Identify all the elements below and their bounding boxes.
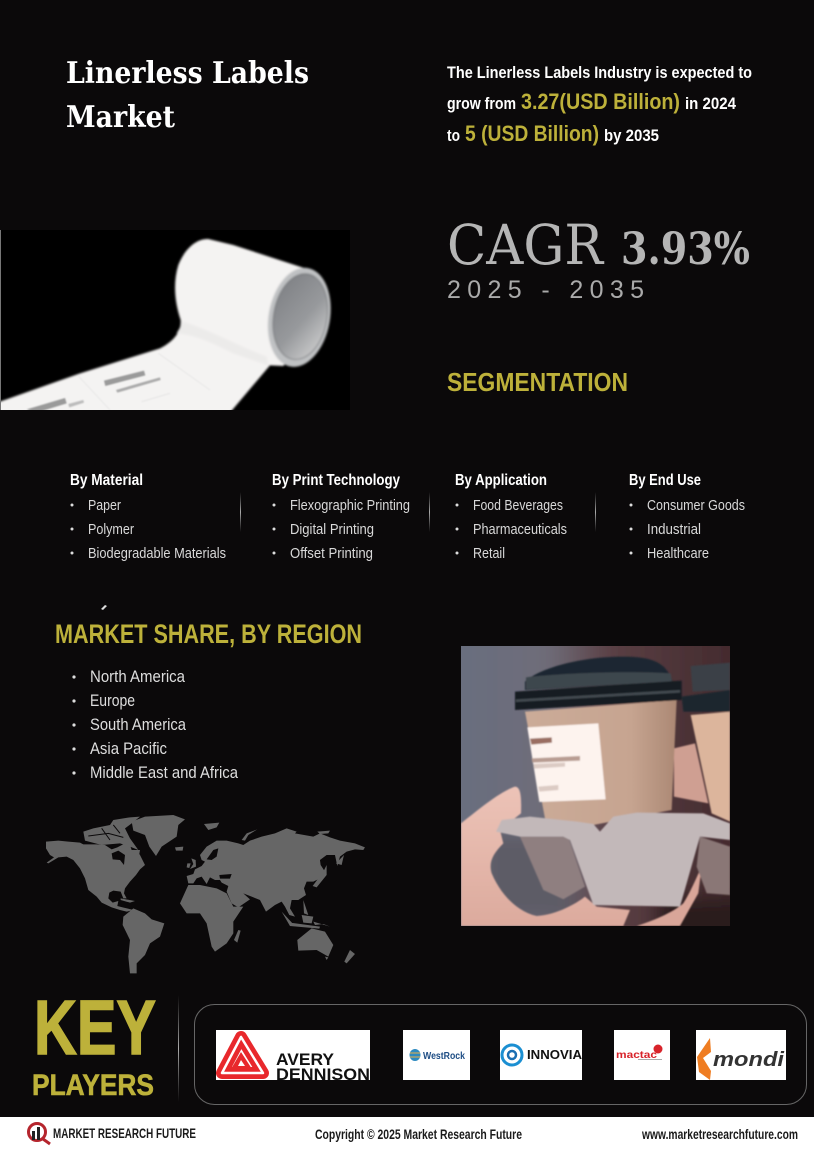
world map — [46, 815, 365, 973]
logo: westrock: WestRock — [423, 1050, 465, 1062]
column: by print technology: Flexographic Printing — [290, 497, 410, 514]
column: by end use: Healthcare — [647, 545, 709, 562]
tray pockets — [520, 837, 585, 899]
greenland — [132, 815, 185, 856]
image: linerless label roll — [0, 230, 350, 417]
iceland and arctic isles — [175, 823, 330, 851]
logo: avery dennison — [216, 1030, 370, 1084]
column: by material: Biodegradable Materials — [88, 545, 226, 562]
logo: innovia — [500, 1030, 583, 1080]
column: by print technology — [272, 472, 410, 562]
market growth summary text — [447, 64, 752, 146]
column: by print technology: By Print Technology — [272, 472, 400, 489]
cup lid — [525, 657, 673, 690]
hand fingers behind cup — [674, 743, 708, 803]
CAGR figure — [447, 213, 750, 304]
madagascar — [234, 930, 241, 943]
column: by material — [70, 472, 226, 562]
asian islands — [282, 855, 344, 929]
column: by material: Polymer — [88, 521, 134, 538]
black sea — [219, 874, 232, 879]
column: by end use — [629, 472, 745, 562]
arctic islands — [83, 817, 140, 850]
column: by application: Retail — [473, 545, 505, 562]
new zealand — [344, 950, 355, 963]
heading: segmentation: SEGMENTATION — [447, 367, 628, 397]
cup label — [527, 723, 606, 802]
logo: mondi — [696, 1030, 786, 1080]
logo: avery dennison: DENNISON — [276, 1066, 370, 1084]
list: regions: South America — [90, 715, 186, 734]
list: regions: Asia Pacific — [90, 739, 167, 758]
title: Market — [66, 100, 175, 135]
heading: market share by region: MARKET SHARE, BY REGION — [55, 619, 362, 649]
column: by end use: By End Use — [629, 472, 701, 489]
market growth summary text: by 2035 — [604, 127, 659, 145]
uk and ireland — [187, 858, 196, 869]
logo: westrock — [403, 1030, 470, 1080]
heading: key players: PLAYERS — [32, 1069, 154, 1102]
column: by material: By Material — [70, 472, 143, 489]
title — [66, 56, 309, 135]
column: by application: Pharmaceuticals — [473, 521, 567, 538]
south america — [123, 908, 164, 973]
list: regions: North America — [90, 667, 185, 686]
tray — [496, 813, 730, 907]
column: by end use: Industrial — [647, 521, 701, 538]
panel: segmentation columns — [70, 472, 745, 562]
icon: market research future logo — [28, 1124, 50, 1144]
list: regions: Europe — [90, 691, 135, 710]
market growth summary text: The Linerless Labels Industry is expected to — [447, 64, 752, 82]
logo: mondi: mondi — [713, 1049, 785, 1071]
heading: key players: KEY — [34, 985, 156, 1071]
CAGR figure: 2025 - 2035 — [447, 276, 644, 304]
arctic channels — [88, 825, 123, 840]
logo: mactac — [614, 1030, 670, 1080]
market growth summary text: grow from — [447, 95, 516, 113]
eurasia — [187, 828, 365, 917]
column: by application: Food Beverages — [473, 497, 563, 514]
title: Linerless Labels — [66, 56, 309, 91]
baltic — [207, 848, 218, 860]
image: coffee cups with labels — [461, 646, 730, 926]
list: regions — [72, 667, 238, 782]
list: regions: Middle East and Africa — [90, 763, 238, 782]
column: by material: Paper — [88, 497, 121, 514]
CAGR figure: 3.93% — [621, 224, 750, 275]
panel: footer — [0, 1117, 814, 1150]
market growth summary text: 5 (USD Billion) — [465, 121, 599, 146]
logo: innovia: INNOVIA — [527, 1047, 583, 1062]
column: by print technology: Offset Printing — [290, 545, 373, 562]
footer copyright: Copyright © 2025 Market Research Future — [315, 1126, 522, 1142]
column: by application — [455, 472, 567, 562]
market growth summary text: 3.27(USD Billion) — [521, 89, 680, 114]
logo: avery dennison: AVERY — [276, 1051, 334, 1069]
market growth summary text: to — [447, 127, 460, 145]
image edge strip — [0, 230, 1, 410]
CAGR figure: CAGR — [447, 213, 604, 277]
logo: mactac: mactac — [616, 1050, 658, 1061]
panel: key player logos — [194, 1004, 806, 1104]
footer brand name: MARKET RESEARCH FUTURE — [53, 1125, 196, 1141]
column: by print technology: Digital Printing — [290, 521, 374, 538]
hand — [461, 787, 630, 926]
africa — [180, 885, 243, 952]
heading: key players — [32, 985, 156, 1102]
australia — [297, 928, 333, 960]
column: by application: By Application — [455, 472, 547, 489]
market growth summary text: in 2024 — [685, 95, 737, 113]
column: by end use: Consumer Goods — [647, 497, 745, 514]
north america — [46, 841, 145, 912]
hudson bay — [112, 851, 125, 865]
cup body — [525, 700, 677, 825]
caribbean — [121, 898, 135, 903]
second cup — [691, 712, 730, 822]
